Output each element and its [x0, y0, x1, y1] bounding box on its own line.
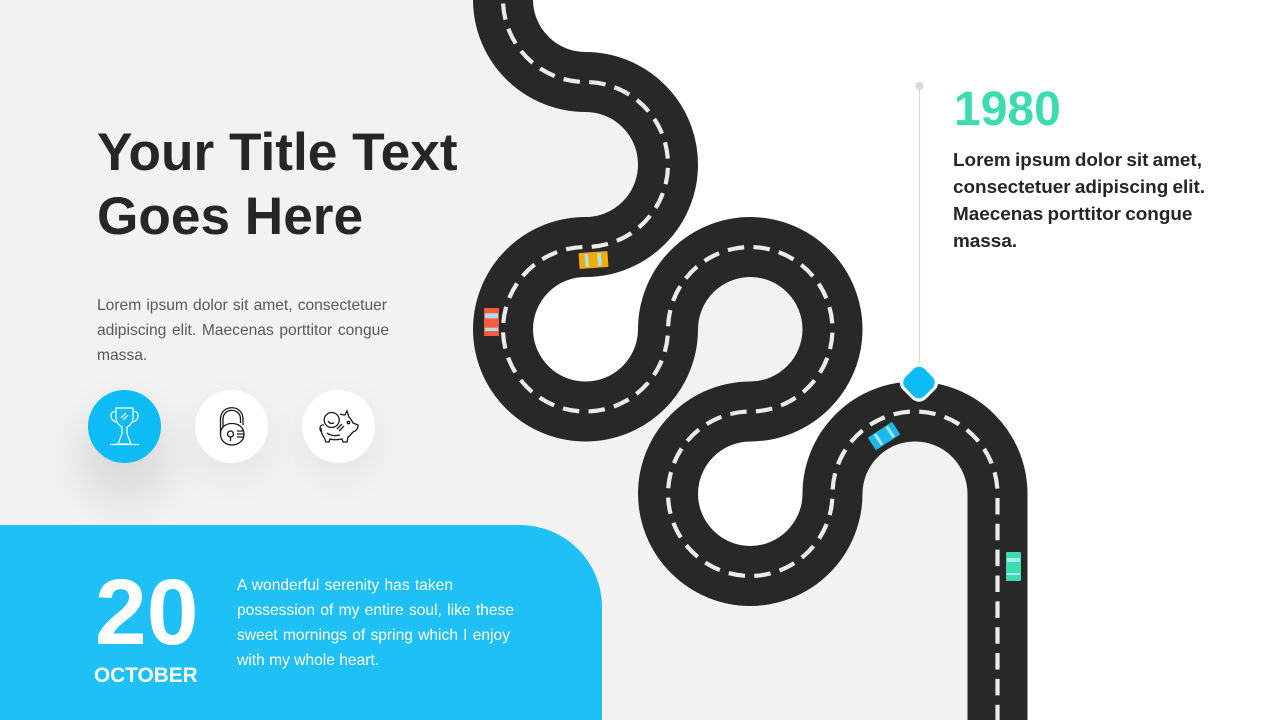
- date description: [237, 576, 514, 668]
- car: blue: [868, 422, 900, 450]
- date description: possession of my entire soul, like these: [237, 602, 514, 618]
- gray background region: [0, 0, 998, 720]
- car: green: [1006, 552, 1021, 581]
- car: yellow: [578, 251, 609, 269]
- date number: 20: [95, 560, 198, 664]
- title: [97, 123, 458, 246]
- intro text: massa.: [97, 347, 147, 364]
- year description: consectetuer adipiscing elit.: [953, 176, 1205, 198]
- icon button: trophy: [88, 390, 161, 463]
- intro text: [97, 297, 389, 364]
- icon button: piggy bank: [302, 390, 375, 463]
- date description: sweet mornings of spring which I enjoy: [237, 626, 510, 644]
- year heading: 1980: [954, 83, 1061, 136]
- title: Goes Here: [97, 187, 363, 246]
- date description: A wonderful serenity has taken: [237, 576, 453, 594]
- title: Your Title Text: [97, 123, 458, 182]
- date description: with my whole heart.: [237, 652, 379, 668]
- year description: [953, 150, 1205, 252]
- timeline leader line: [916, 82, 924, 368]
- year description: Maecenas porttitor congue: [953, 204, 1192, 224]
- timeline marker: [896, 359, 942, 406]
- icon button: padlock: [195, 390, 268, 463]
- car: red: [484, 308, 499, 336]
- panel: date: [0, 525, 602, 720]
- intro text: Lorem ipsum dolor sit amet, consectetuer: [97, 297, 387, 314]
- year description: Lorem ipsum dolor sit amet,: [953, 150, 1202, 170]
- intro text: adipiscing elit. Maecenas porttitor congue: [97, 322, 389, 339]
- winding road: [503, 0, 998, 720]
- year description: massa.: [953, 230, 1017, 252]
- date month: OCTOBER: [94, 664, 198, 687]
